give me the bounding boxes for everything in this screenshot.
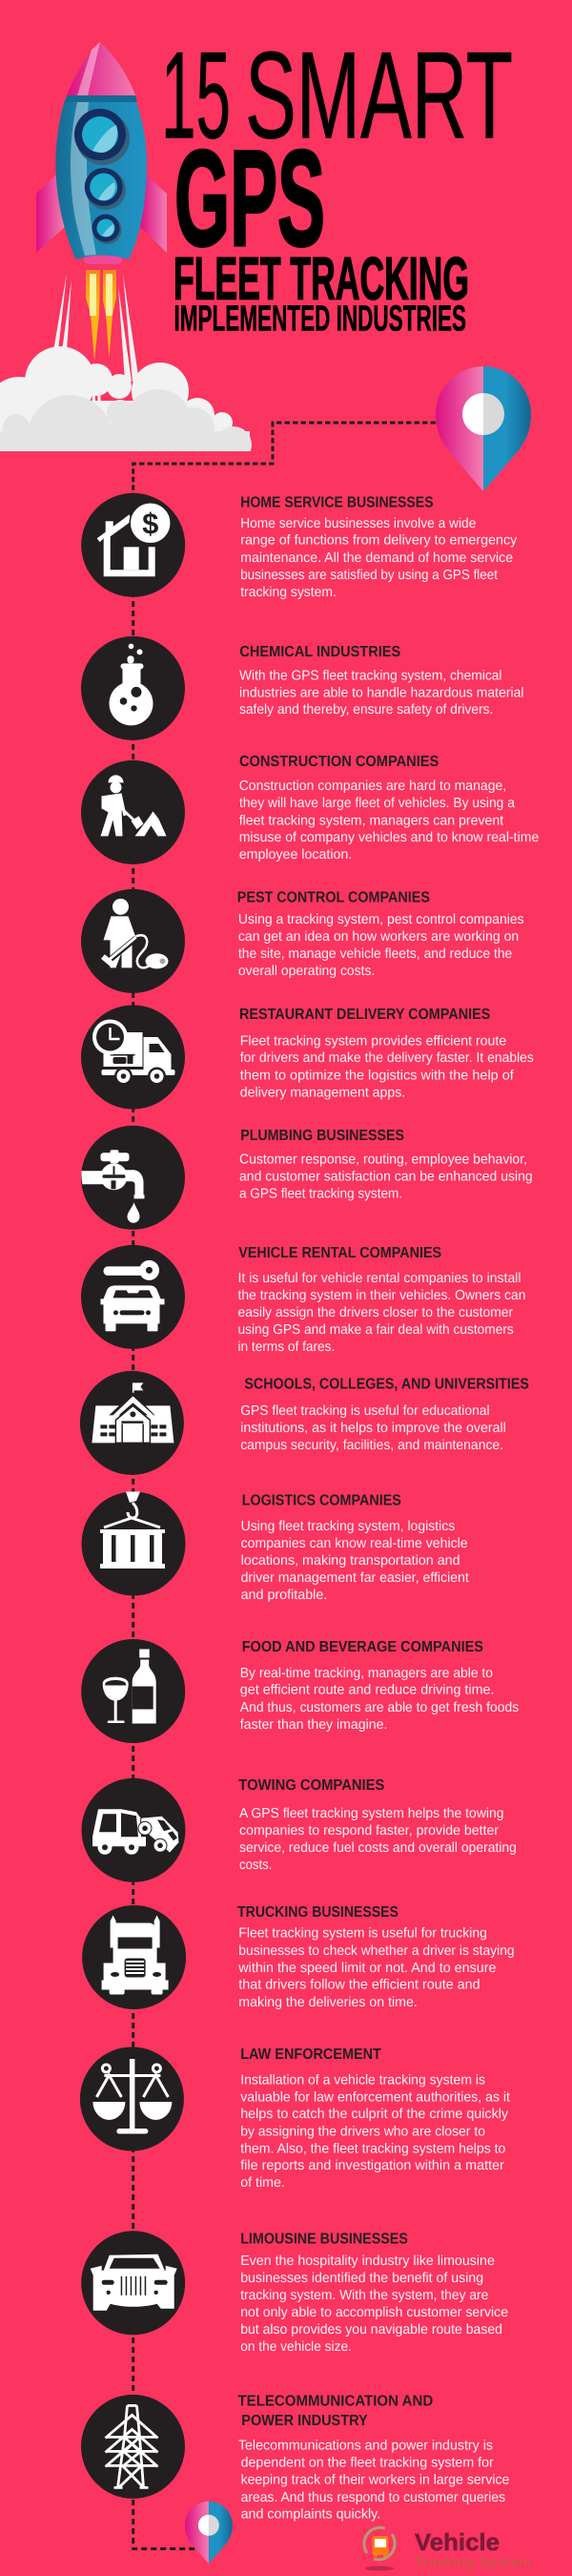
section: Construction Companies xyxy=(81,754,539,864)
cloud front xyxy=(0,389,252,451)
title line: 15 SMART xyxy=(161,25,513,164)
description: Fleet tracking system provides efficient route xyxy=(240,1033,506,1049)
description: With the GPS fleet tracking system, chemical xyxy=(239,668,501,683)
description: Using fleet tracking system, logistics xyxy=(241,1519,455,1534)
description xyxy=(240,2254,508,2355)
description xyxy=(240,1403,506,1453)
description: Installation of a vehicle tracking system is xyxy=(240,2072,485,2088)
nose highlight xyxy=(77,42,100,95)
description: the site, manage vehicle fleets, and reduce the xyxy=(238,946,512,962)
description xyxy=(240,1666,519,1733)
description: service, reduce fuel costs and overall operating xyxy=(239,1840,517,1856)
heading: LAW ENFORCEMENT xyxy=(240,2046,381,2063)
description: businesses are satisfied by using a GPS fleet xyxy=(240,568,498,583)
description: fleet tracking system, managers can prevent xyxy=(239,813,503,828)
description xyxy=(241,1519,469,1603)
dashed route line: top xyxy=(133,423,436,496)
icon: delivery truck with clock xyxy=(81,1006,185,1109)
heading: VEHICLE RENTAL COMPANIES xyxy=(238,1245,441,1261)
description: Home service businesses involve a wide xyxy=(240,516,476,531)
cloud back xyxy=(0,346,233,431)
title xyxy=(161,25,513,340)
description: by assigning the drivers who are closer to xyxy=(240,2124,485,2139)
description: range of functions from delivery to emergency xyxy=(240,533,518,549)
rocket band xyxy=(65,95,137,102)
description xyxy=(238,1271,526,1355)
description: but also provides you navigable route based xyxy=(240,2322,502,2337)
description: valuable for law enforcement authorities, as it xyxy=(240,2089,510,2105)
description: safely and thereby, ensure safety of drivers. xyxy=(239,702,493,717)
icon: person with vacuum xyxy=(81,889,185,993)
rocket body highlight xyxy=(71,102,96,256)
rocket window small xyxy=(92,214,122,244)
section: Restaurant Delivery Companies xyxy=(81,1006,534,1109)
icon: top map pin xyxy=(436,366,531,491)
description: And thus, customers are able to get fresh foods xyxy=(240,1700,519,1715)
description xyxy=(239,1152,533,1201)
icon: key and car xyxy=(81,1245,185,1349)
description: Telecommunications and power industry is xyxy=(238,2439,493,2454)
illustration: rocket launch xyxy=(0,42,252,481)
description: areas. And thus respond to customer queries xyxy=(241,2490,505,2505)
logo icon: bus with arrows xyxy=(364,2527,395,2570)
rocket fins xyxy=(36,172,167,253)
description: and profitable. xyxy=(241,1588,327,1603)
heading: TRUCKING BUSINESSES xyxy=(237,1904,398,1921)
description: campus security, facilities, and maintenance. xyxy=(240,1438,503,1453)
heading: CONSTRUCTION COMPANIES xyxy=(239,754,439,770)
description: dependent on the fleet tracking system for xyxy=(241,2456,494,2471)
description: and complaints quickly. xyxy=(241,2507,380,2523)
description: driver management far easier, efficient xyxy=(241,1570,469,1586)
description: keeping track of their workers in large service xyxy=(241,2473,509,2488)
section: Schools, Colleges, and Universities xyxy=(80,1371,529,1475)
rocket window medium xyxy=(85,168,126,210)
description: GPS fleet tracking is useful for educational xyxy=(240,1403,490,1419)
description: tracking system. xyxy=(240,585,337,600)
section: Home Service Businesses xyxy=(81,493,518,600)
icon: crane hook and container xyxy=(82,1492,185,1595)
description: employee location. xyxy=(239,847,352,862)
description xyxy=(240,2072,510,2191)
description: using GPS and make a fair deal with customers xyxy=(238,1322,514,1338)
description: A GPS fleet tracking system helps the towing xyxy=(239,1806,503,1821)
description: a GPS fleet tracking system. xyxy=(239,1186,402,1201)
description: maintenance. All the demand of home service xyxy=(240,551,513,566)
description xyxy=(239,1806,517,1873)
section: Law Enforcement xyxy=(80,2046,510,2191)
logo: Vehicle Tracking System xyxy=(364,2527,530,2570)
description: in terms of fares. xyxy=(238,1340,335,1355)
description: easily assign the drivers closer to the customer xyxy=(238,1305,513,1320)
description: tracking system. With the system, they are xyxy=(240,2288,488,2303)
section: Telecommunication and Power Industry xyxy=(81,2393,509,2523)
description: get efficient route and reduce driving time. xyxy=(240,1683,495,1698)
description: them to optimize the logistics with the help of xyxy=(240,1068,515,1083)
description xyxy=(237,1926,515,2010)
section: Vehicle Rental Companies xyxy=(81,1245,526,1355)
description: helps to catch the culprit of the crime quickly xyxy=(240,2107,509,2122)
section: Towing Companies xyxy=(82,1777,517,1882)
rocket nose xyxy=(67,42,135,95)
description xyxy=(238,2439,509,2523)
description xyxy=(238,912,524,979)
description: not only able to accomplish customer service xyxy=(240,2305,508,2320)
description: Customer response, routing, employee behavior, xyxy=(239,1152,527,1167)
description: of time. xyxy=(240,2175,285,2191)
description: It is useful for vehicle rental companies to install xyxy=(238,1271,521,1286)
description: within the speed limit or not. And to ensure xyxy=(237,1961,497,1976)
heading: PLUMBING BUSINESSES xyxy=(240,1128,404,1144)
heading: SCHOOLS, COLLEGES, AND UNIVERSITIES xyxy=(244,1377,529,1393)
section: Food and Beverage Companies xyxy=(81,1639,519,1743)
description: locations, making transportation and xyxy=(241,1553,460,1568)
heading: POWER INDUSTRY xyxy=(241,2413,368,2429)
icon: transmission tower xyxy=(81,2395,185,2499)
description: Fleet tracking system is useful for trucking xyxy=(238,1926,487,1942)
heading: TOWING COMPANIES xyxy=(238,1777,385,1794)
description: and customer satisfaction can be enhanced using xyxy=(239,1170,533,1185)
description: institutions, as it helps to improve the overall xyxy=(240,1421,506,1436)
rocket body xyxy=(55,100,147,260)
description: businesses to check whether a driver is staying xyxy=(238,1943,515,1959)
section: Plumbing Businesses xyxy=(81,1126,533,1230)
logo wordmark: Vehicle xyxy=(415,2529,500,2556)
description: industries are able to handle hazardous material xyxy=(239,685,524,700)
section: Limousine Businesses xyxy=(81,2231,508,2355)
heading: TELECOMMUNICATION AND xyxy=(238,2393,433,2409)
description: delivery management apps. xyxy=(240,1085,405,1100)
icon: bottom map pin xyxy=(185,2502,233,2564)
description xyxy=(240,516,518,600)
heading: LIMOUSINE BUSINESSES xyxy=(240,2231,408,2247)
title line: GPS: GPS xyxy=(174,123,325,275)
description: businesses identified the benefit of using xyxy=(240,2271,483,2286)
icon: house with dollar: $ xyxy=(142,507,158,540)
description: making the deliveries on time. xyxy=(238,1995,418,2010)
icon: construction worker xyxy=(81,760,185,864)
rocket nozzle xyxy=(84,254,122,264)
heading: HOME SERVICE BUSINESSES xyxy=(240,494,434,510)
rocket window large xyxy=(74,109,130,165)
description: them. Also, the fleet tracking system helps to xyxy=(240,2141,505,2156)
description: they will have large fleet of vehicles. By using a xyxy=(239,796,516,811)
description: companies to respond faster, provide better xyxy=(239,1823,499,1839)
icon: scales of justice xyxy=(80,2047,184,2150)
section: Chemical Industries xyxy=(81,636,524,740)
icon: faucet with wrench xyxy=(81,1126,185,1230)
heading: PEST CONTROL COMPANIES xyxy=(237,890,430,906)
heading: CHEMICAL INDUSTRIES xyxy=(239,644,400,660)
description: that drivers follow the efficient route and xyxy=(238,1978,480,1993)
icon: tow truck xyxy=(82,1778,185,1882)
icon: house with dollar xyxy=(81,493,185,597)
section: Pest Control Companies xyxy=(81,889,524,993)
description: costs. xyxy=(239,1858,272,1873)
description: file reports and investigation within a matter xyxy=(240,2158,504,2173)
icon: school building xyxy=(80,1371,184,1475)
description: misuse of company vehicles and to know real-time xyxy=(239,830,539,845)
icon: truck front xyxy=(82,1905,186,2009)
description: Even the hospitality industry like limousine xyxy=(240,2254,495,2269)
description: By real-time tracking, managers are able to xyxy=(240,1666,493,1681)
logo tagline: Tracking System xyxy=(415,2555,530,2569)
description: Using a tracking system, pest control companies xyxy=(238,912,524,927)
section: Logistics Companies xyxy=(82,1492,469,1603)
description: Construction companies are hard to manage, xyxy=(239,779,506,794)
description: the tracking system in their vehicles. Owners can xyxy=(238,1288,526,1303)
heading: LOGISTICS COMPANIES xyxy=(242,1492,401,1509)
icon: flask xyxy=(81,636,185,740)
description xyxy=(239,779,539,862)
icon: limousine front xyxy=(81,2231,185,2335)
icon: wine glass and bottle xyxy=(81,1639,185,1743)
description: companies can know real-time vehicle xyxy=(241,1536,468,1551)
heading: RESTAURANT DELIVERY COMPANIES xyxy=(239,1007,491,1023)
title line: 15 SMART: 15 xyxy=(161,25,231,164)
description: on the vehicle size. xyxy=(240,2339,352,2355)
smoke trails xyxy=(53,273,139,420)
description xyxy=(239,668,524,717)
description: overall operating costs. xyxy=(238,964,375,979)
dashed route line: main vertical xyxy=(133,496,195,2549)
heading xyxy=(238,2393,433,2429)
description: can get an idea on how workers are working on xyxy=(238,929,519,945)
description: for drivers and make the delivery faster. It enables xyxy=(240,1050,534,1066)
section: Trucking Businesses xyxy=(82,1904,515,2010)
description xyxy=(240,1033,534,1100)
heading: FOOD AND BEVERAGE COMPANIES xyxy=(242,1639,483,1655)
flames xyxy=(86,270,116,361)
description: faster than they imagine. xyxy=(240,1717,387,1733)
